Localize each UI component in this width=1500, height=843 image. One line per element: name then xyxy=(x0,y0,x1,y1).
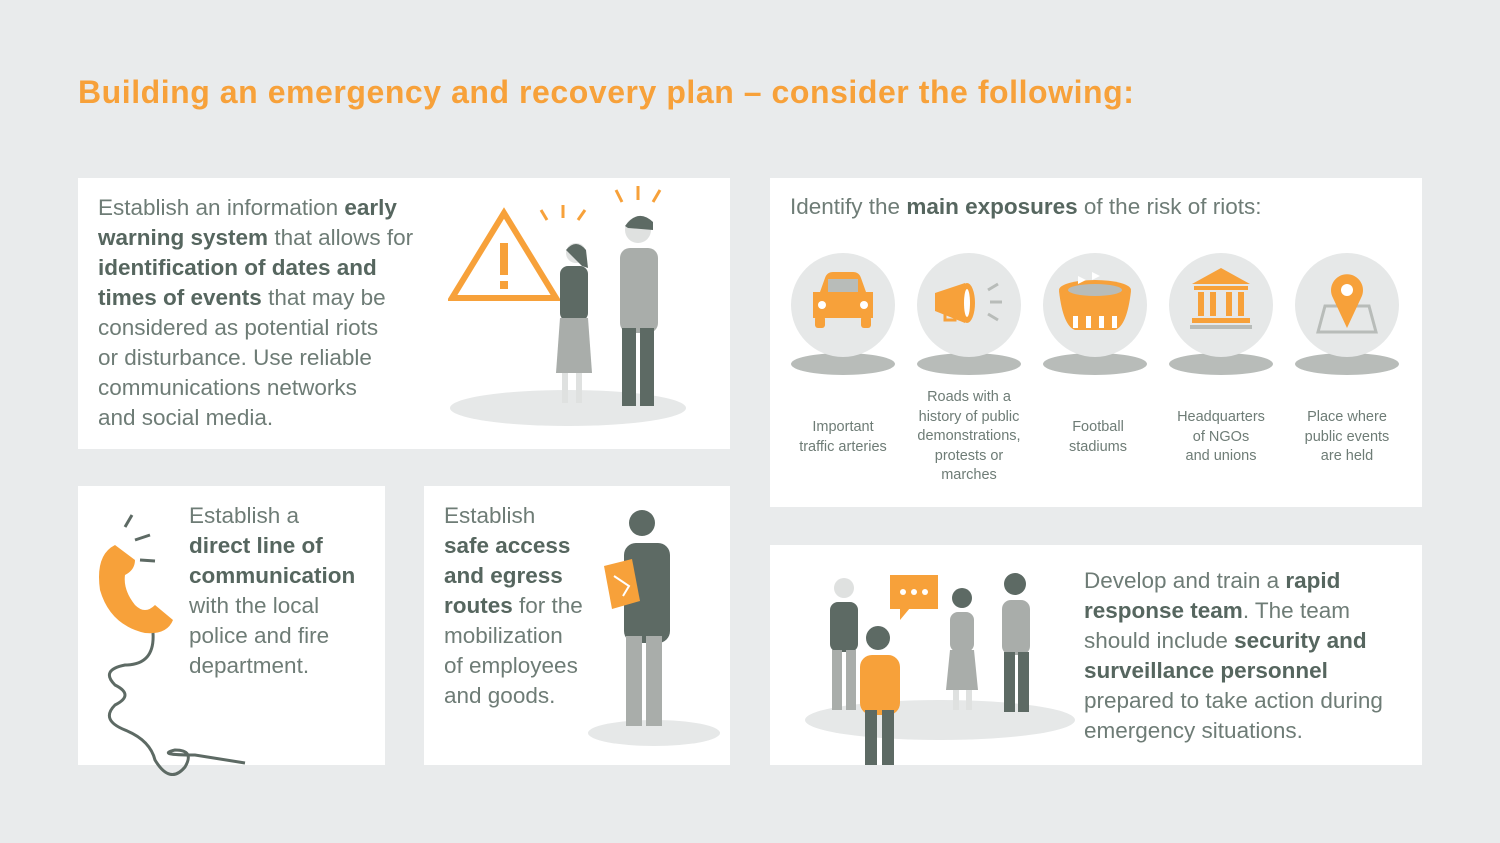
text: direct line: department. xyxy=(189,653,309,678)
text: safe access: and egress xyxy=(444,563,563,588)
text: early warning: identification of dates and xyxy=(98,255,377,280)
panel: early warning xyxy=(78,178,730,449)
text: direct line: Establish a xyxy=(189,503,299,528)
text: safe access: of employees xyxy=(444,653,578,678)
text: early warning: Establish an information early xyxy=(98,195,397,220)
icon: phone with cord xyxy=(99,514,246,776)
icon: car xyxy=(813,272,873,328)
icon: stadium xyxy=(1059,272,1131,330)
icons row xyxy=(791,253,1399,375)
text: direct line xyxy=(189,503,355,678)
text: safe access: mobilization xyxy=(444,623,563,648)
text: early warning xyxy=(98,195,413,430)
illustration: team xyxy=(805,573,1075,765)
text: early warning: considered as potential riots xyxy=(98,315,378,340)
text: rapid response: emergency situations. xyxy=(1084,718,1303,743)
label: roads: demonstrations, xyxy=(917,428,1021,444)
text: rapid response: surveillance personnel xyxy=(1084,658,1328,683)
label: NGOs: Headquarters xyxy=(1177,409,1265,425)
text: direct line: direct line of xyxy=(189,533,323,558)
text: safe access: Establish xyxy=(444,503,535,528)
illustration: warning sign and people xyxy=(448,186,686,426)
label: traffic: traffic arteries xyxy=(799,438,887,454)
label: traffic: Important xyxy=(812,419,874,435)
text: safe access: safe access xyxy=(444,533,570,558)
label: traffic xyxy=(799,419,887,454)
text: direct line: police and fire xyxy=(189,623,329,648)
text: early warning: communications networks xyxy=(98,375,357,400)
panel: main exposures xyxy=(770,178,1422,507)
label: public events xyxy=(1305,409,1389,464)
label: stadiums: stadiums xyxy=(1069,438,1127,454)
label: NGOs: and unions xyxy=(1186,448,1256,464)
text: early warning: or disturbance. Use reliable xyxy=(98,345,372,370)
panel: direct line xyxy=(78,486,385,765)
text: rapid response: should include security and xyxy=(1084,628,1367,653)
heading: exposures: Identify the main exposures of the risk of riots: xyxy=(790,194,1261,219)
text: early warning: times of events that may be xyxy=(98,285,386,310)
label: public events: Place where xyxy=(1307,409,1387,425)
text: rapid response: prepared to take action during xyxy=(1084,688,1383,713)
label: public events: are held xyxy=(1321,448,1373,464)
text: safe access xyxy=(444,503,583,708)
label: NGOs: of NGOs xyxy=(1193,428,1249,444)
label: roads: marches xyxy=(941,467,997,483)
text: early warning: warning system that allows for xyxy=(98,225,413,250)
label: roads: history of public xyxy=(919,408,1019,424)
text: safe access: and goods. xyxy=(444,683,555,708)
icon: map pin xyxy=(1318,274,1376,332)
text: safe access: routes for the xyxy=(444,593,583,618)
panel: rapid response xyxy=(770,545,1422,765)
label: stadiums: Football xyxy=(1072,419,1124,435)
label: roads xyxy=(917,389,1021,483)
icon: megaphone xyxy=(935,283,1002,323)
label: public events: public events xyxy=(1305,428,1389,444)
illustration: man with map xyxy=(588,510,720,746)
text: rapid response: response team. The team xyxy=(1084,598,1350,623)
text: rapid response: Develop and train a rapid xyxy=(1084,568,1340,593)
text: direct line: communication xyxy=(189,563,355,588)
text: rapid response xyxy=(1084,568,1383,743)
text: direct line: with the local xyxy=(189,593,319,618)
icon: building xyxy=(1190,268,1252,329)
label: stadiums xyxy=(1069,419,1127,454)
title: Building an emergency and recovery plan – consider the following: xyxy=(78,74,1134,110)
text: early warning: and social media. xyxy=(98,405,273,430)
panel: safe access xyxy=(424,486,730,765)
label: NGOs xyxy=(1177,409,1265,464)
label: roads: protests or xyxy=(935,448,1003,464)
label: roads: Roads with a xyxy=(927,389,1011,405)
